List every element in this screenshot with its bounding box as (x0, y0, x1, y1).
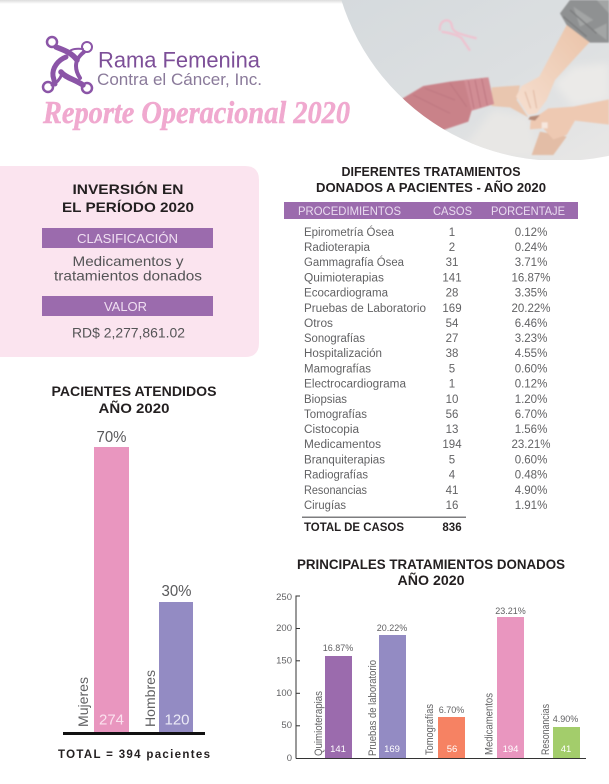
valor bar: VALOR (104, 299, 147, 314)
lower arm (532, 132, 567, 155)
table header: PROCEDIMIENTOS (298, 206, 401, 218)
table rows: 0.24% (515, 242, 547, 254)
table rows: 4.55% (515, 348, 547, 360)
table rows: Biopsias (304, 394, 347, 406)
bar: resonancias (540, 704, 580, 758)
table rows: 6.46% (515, 318, 547, 330)
bar: mujeres: Mujeres (75, 677, 91, 727)
table rows: Electrocardiograma (304, 378, 407, 390)
wrist from sleeve (492, 85, 528, 117)
table rows: 141 (442, 272, 462, 284)
bar: medicamentos: 194 (503, 744, 518, 755)
table rows: Radiografías (304, 470, 368, 482)
y axis (276, 592, 300, 764)
clasificación bar (42, 228, 213, 248)
y axis: 100 (276, 688, 292, 699)
table rows: 3.23% (515, 333, 547, 345)
bar: hombres: 30% (162, 583, 192, 600)
table rows: Branquiterapias (304, 454, 385, 466)
bar: mujeres (75, 429, 129, 732)
panel heading: INVERSIÓN EN (72, 180, 184, 197)
logo wordmark: Rama Femenina (98, 48, 261, 72)
table rows: 41 (446, 485, 458, 497)
table header: PORCENTAJE (491, 206, 565, 218)
treatments chart heading: PRINCIPALES TRATAMIENTOS DONADOS (297, 557, 565, 572)
table rows: Medicamentos (304, 439, 381, 451)
table rows: 1 (449, 378, 455, 390)
y axis: 50 (281, 720, 292, 731)
patients heading: AÑO 2020 (98, 401, 170, 416)
table rows: 0.60% (515, 364, 547, 376)
table rows: 169 (442, 303, 462, 315)
bar: pruebas de laboratorio: 169 (384, 744, 400, 755)
table rows: 4 (449, 470, 456, 482)
clasificación value (54, 253, 202, 284)
table rows: Ecocardiograma (304, 288, 389, 300)
bar: medicamentos (484, 606, 526, 758)
bar: tomografías: 6.70% (439, 705, 464, 715)
valor bar (42, 296, 213, 316)
table rows: 20.22% (511, 303, 551, 315)
logo wordmark (97, 48, 262, 89)
table rows: Cirugías (304, 500, 346, 512)
ribbon (440, 20, 477, 51)
sleeve: grey sweater (560, 0, 609, 43)
panel heading (62, 180, 194, 215)
treatments chart heading: AÑO 2020 (398, 573, 464, 588)
table rows: Pruebas de Laboratorio (304, 303, 426, 315)
table heading: DIFERENTES TRATAMIENTOS (342, 164, 521, 179)
table rows (304, 226, 551, 512)
table rows: Otros (304, 318, 333, 330)
table rows: 4.90% (515, 485, 547, 497)
logo: ribbon emblem (43, 37, 92, 93)
bar: resonancias: Resonancias (540, 704, 552, 755)
table rows: 194 (442, 439, 462, 451)
upper arm and hand (516, 25, 590, 115)
table rows: Gammagrafía Ósea (304, 256, 405, 269)
table rows: Sonografías (304, 333, 365, 345)
bar: quimioterapias: 141 (330, 744, 346, 755)
logo wordmark: Contra el Cáncer, Inc. (97, 70, 262, 89)
table rows: 56 (446, 409, 458, 421)
table rows: 28 (446, 288, 458, 300)
patients bar chart (63, 429, 205, 735)
table rows: 5 (449, 454, 455, 466)
table rows: 27 (446, 333, 458, 345)
table rows: 0.48% (515, 470, 547, 482)
sleeve: pink sweater (402, 79, 472, 130)
bar: quimioterapias: Quimioterapias (313, 691, 325, 756)
table heading: DONADOS A PACIENTES - AÑO 2020 (316, 180, 546, 195)
table rows: 38 (446, 348, 458, 360)
treatments chart heading (297, 557, 565, 588)
patients heading: PACIENTES ATENDIDOS (52, 384, 216, 399)
table rows: Quimioterapias (304, 272, 384, 284)
table rows: 31 (446, 257, 458, 269)
table rows: 23.21% (511, 439, 551, 451)
bar: mujeres: 70% (96, 429, 127, 446)
y axis: 0 (287, 753, 292, 764)
bar: medicamentos: 23.21% (495, 606, 526, 616)
table rows: 3.71% (515, 257, 547, 269)
bar: quimioterapias: 16.87% (323, 643, 353, 653)
y axis: 250 (276, 592, 292, 603)
y axis: 150 (276, 656, 292, 666)
bar: pruebas de laboratorio (367, 623, 407, 758)
table rows: 2 (449, 242, 455, 254)
bar: pruebas de laboratorio: Pruebas de laboratorio (367, 660, 379, 756)
bar: mujeres: 274 (99, 712, 124, 728)
table rows: 0.12% (515, 227, 547, 239)
table header: CASOS (433, 206, 472, 218)
table rows: 13 (446, 424, 458, 436)
table rows: Resonancias (304, 485, 367, 497)
bar: medicamentos: Medicamentos (484, 693, 496, 755)
bar: resonancias: 41 (561, 744, 571, 755)
bar: hombres: 120 (164, 712, 190, 728)
clasificación value: Medicamentos y (72, 253, 184, 269)
table rows: Tomografías (304, 409, 367, 421)
bar: tomografías: 56 (447, 744, 457, 755)
table rows: 16 (446, 500, 458, 512)
patients total: TOTAL = 394 pacientes (58, 749, 210, 761)
bar: hombres: Hombres (142, 670, 158, 727)
bar: tomografías (424, 704, 465, 758)
table total (302, 516, 466, 534)
bar: tomografías: Tomografías (424, 704, 436, 755)
table rows: Hospitalización (304, 348, 382, 360)
table heading (316, 164, 546, 195)
table rows: 54 (446, 318, 459, 330)
bar: hombres (142, 583, 193, 732)
clasificación value: tratamientos donados (54, 268, 202, 284)
photo: hands and pink ribbon (330, 0, 609, 160)
table rows: 6.70% (515, 409, 547, 421)
table rows: Epirometría Ósea (304, 226, 395, 239)
table rows: 0.60% (515, 454, 547, 466)
panel heading: EL PERÍODO 2020 (62, 199, 194, 215)
y axis: 200 (276, 623, 292, 634)
table rows: 1 (449, 227, 455, 239)
table header (284, 202, 578, 219)
table total: TOTAL DE CASOS (304, 522, 404, 534)
table rows: 16.87% (511, 272, 551, 284)
table rows: 5 (449, 364, 455, 376)
treatments bar chart (276, 592, 586, 764)
bar: resonancias: 4.90% (553, 714, 578, 724)
table rows: 1.91% (515, 500, 547, 512)
table rows: 1.56% (515, 424, 547, 436)
bar: quimioterapias (313, 643, 353, 758)
table rows: 0.12% (515, 378, 547, 390)
table rows: 1.20% (515, 394, 547, 406)
clasificación bar: CLASIFICACIÓN (77, 231, 178, 246)
valor amount: RD$ 2,277,861.02 (72, 324, 185, 340)
table rows: Mamografías (304, 364, 371, 376)
table rows: Radioterapia (304, 242, 371, 254)
right arm and hand (530, 99, 609, 139)
bar: pruebas de laboratorio: 20.22% (377, 623, 407, 633)
title: Reporte Operacional 2020 (42, 94, 350, 130)
patients heading (52, 384, 216, 416)
table total: 836 (442, 522, 462, 534)
table rows: 3.35% (515, 288, 547, 300)
panel: inversión (0, 166, 259, 357)
table rows: Cistocopia (304, 424, 360, 436)
table rows: 10 (446, 394, 458, 406)
